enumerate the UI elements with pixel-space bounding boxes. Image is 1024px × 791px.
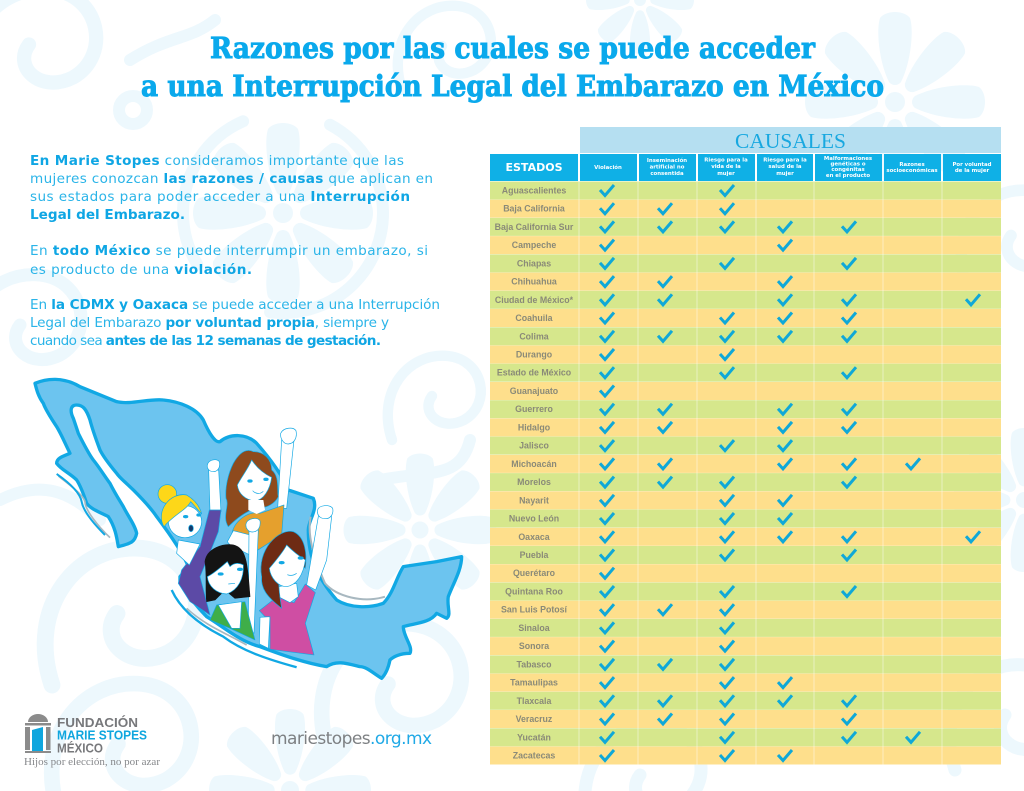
header: causales band [580,127,1001,153]
woman: black hair, green top [205,518,260,640]
text block: CDMX y Oaxaca [30,297,440,349]
row: Chiapas: Chiapas [517,258,551,268]
row: Baja California Sur: Baja California Sur [495,222,574,232]
row: Guanajuato: Guanajuato [510,386,559,396]
header: column titles [490,154,1001,181]
logo wordmark: MÉXICO [57,740,103,756]
row: Veracruz: Veracruz [516,714,553,724]
row: Querétaro: Querétaro [513,568,556,578]
row: Ciudad de México: Ciudad de México* [495,295,574,305]
row: Aguascalientes: Aguascalientes [502,186,566,196]
text block: todo México: En todo México se puede interrumpir un embarazo, si [30,243,428,259]
text block: CDMX y Oaxaca: cuando sea antes de las 12 semanas de gestación. [30,333,381,349]
logo wordmark [57,715,147,756]
header: column titles: en el producto [826,173,870,179]
illustration: map of Mexico with women [35,379,462,678]
row: Tabasco [490,655,1001,673]
title [141,31,884,103]
row: Nayarit [490,491,1001,509]
row: Ciudad de México [490,291,1001,309]
logo: Fundación Marie Stopes México [24,714,160,768]
header: column titles: Riesgo para la [763,158,807,164]
table: causales por estado [490,127,1001,765]
title: Razones por las cuales se puede acceder [210,31,816,65]
row: Oaxaca: Oaxaca [518,532,550,542]
row: Tamaulipas: Tamaulipas [510,678,558,688]
row: Yucatán [490,728,1001,746]
row: Nuevo León: Nuevo León [509,514,559,524]
row: Jalisco: Jalisco [519,441,550,451]
row: San Luis Potosí [490,601,1001,619]
row: Sinaloa: Sinaloa [518,623,550,633]
row: Zacatecas: Zacatecas [513,750,555,760]
row: Oaxaca [490,528,1001,546]
row: Campeche: Campeche [512,240,556,250]
row: Querétaro [490,564,1001,582]
row: Michoacán [490,455,1001,473]
header: column titles: vida de la [711,164,741,170]
row: Durango: Durango [516,350,553,360]
row: Morelos [490,473,1001,491]
row: Baja California: Baja California [503,204,565,214]
row: Colima: Colima [519,331,549,341]
row: Zacatecas [490,746,1001,764]
row: Coahuila: Coahuila [515,313,553,323]
text block: todo México [30,243,428,278]
header: column titles: Violación [594,164,622,171]
header: column titles: Razones [899,162,925,168]
row: Morelos: Morelos [517,477,551,487]
row: Guerrero [490,400,1001,418]
row: Nayarit: Nayarit [519,495,549,505]
row: Estado de México: Estado de México [497,368,572,378]
row: Durango [490,346,1001,364]
row: Baja California [490,200,1001,218]
header: column titles: artificial no [650,164,685,170]
row: Chihuahua: Chihuahua [511,277,557,287]
row: Tabasco: Tabasco [516,659,552,669]
map of Mexico [35,379,462,678]
logo wordmark: FUNDACIÓN [57,715,138,730]
row: Veracruz [490,710,1001,728]
row: Puebla: Puebla [520,550,549,560]
row: Chihuahua [490,273,1001,291]
row: Tlaxcala: Tlaxcala [517,696,551,706]
woman: pink shirt [259,506,333,655]
row: Sinaloa [490,619,1001,637]
text block: intro: mujeres conozcan las razones / causas que aplican en [30,171,433,187]
row: Hidalgo: Hidalgo [518,422,551,432]
woman: orange shirt [226,428,296,555]
row: Tlaxcala [490,692,1001,710]
row: Quintana Roo [490,582,1001,600]
title: a una Interrupción Legal del Embarazo en México [141,69,884,103]
row: San Luis Potosí: San Luis Potosí [501,605,568,615]
row: Colima [490,327,1001,345]
row: Jalisco [490,437,1001,455]
header: column titles: mujer [776,171,794,177]
row: Quintana Roo: Quintana Roo [505,586,563,596]
icon: door with columns [25,714,51,753]
text block: intro [30,153,433,223]
logo tagline: Hijos por elección, no por azar [24,756,160,768]
row: Baja California Sur [490,218,1001,236]
header: column titles: Riesgo para la [704,158,748,164]
website url: mariestopes.org.mx [271,729,432,749]
header: column titles: Por voluntad [952,162,992,168]
row: Tamaulipas [490,674,1001,692]
row: Coahuila [490,309,1001,327]
row: Sonora: Sonora [519,641,549,651]
header: column titles: Inseminación [647,157,687,164]
row: Guanajuato [490,382,1001,400]
woman: blonde, purple shirt [158,460,221,615]
row: Guerrero: Guerrero [515,404,553,414]
header: column titles: salud de la [768,164,802,170]
header: column titles: ESTADOS [505,161,563,174]
header: column titles: congénitas [831,166,865,173]
header: column titles: socioeconómicas [886,167,938,174]
row: Yucatán: Yucatán [517,732,551,742]
text block: intro: Legal del Embarazo. [30,207,185,223]
header: column titles: Malformaciones [824,156,872,162]
row: Puebla [490,546,1001,564]
row: Nuevo León [490,510,1001,528]
row: Campeche [490,236,1001,254]
text block: CDMX y Oaxaca: En la CDMX y Oaxaca se puede acceder a una Interrupción [30,297,440,313]
row: Estado de México [490,364,1001,382]
row: Michoacán: Michoacán [511,459,557,469]
row: Chiapas [490,254,1001,272]
header: column titles: genéticas o [830,160,866,168]
header: column titles: de la mujer [955,168,990,174]
header: column titles: mujer [717,171,735,177]
header: causales band: CAUSALES [735,129,846,153]
text block: CDMX y Oaxaca: Legal del Embarazo por voluntad propia, siempre y [30,315,389,331]
header: column titles: consentida [650,171,684,177]
text block: intro: sus estados para poder acceder a una Interrupción [30,189,410,205]
text block: intro: En Marie Stopes consideramos importante que las [30,153,404,169]
row: Sonora [490,637,1001,655]
row: Aguascalientes [490,182,1001,200]
women [158,428,333,655]
text block: todo México: es producto de una violación. [30,262,252,278]
logo wordmark: MARIE STOPES [57,728,147,742]
row: Hidalgo [490,418,1001,436]
